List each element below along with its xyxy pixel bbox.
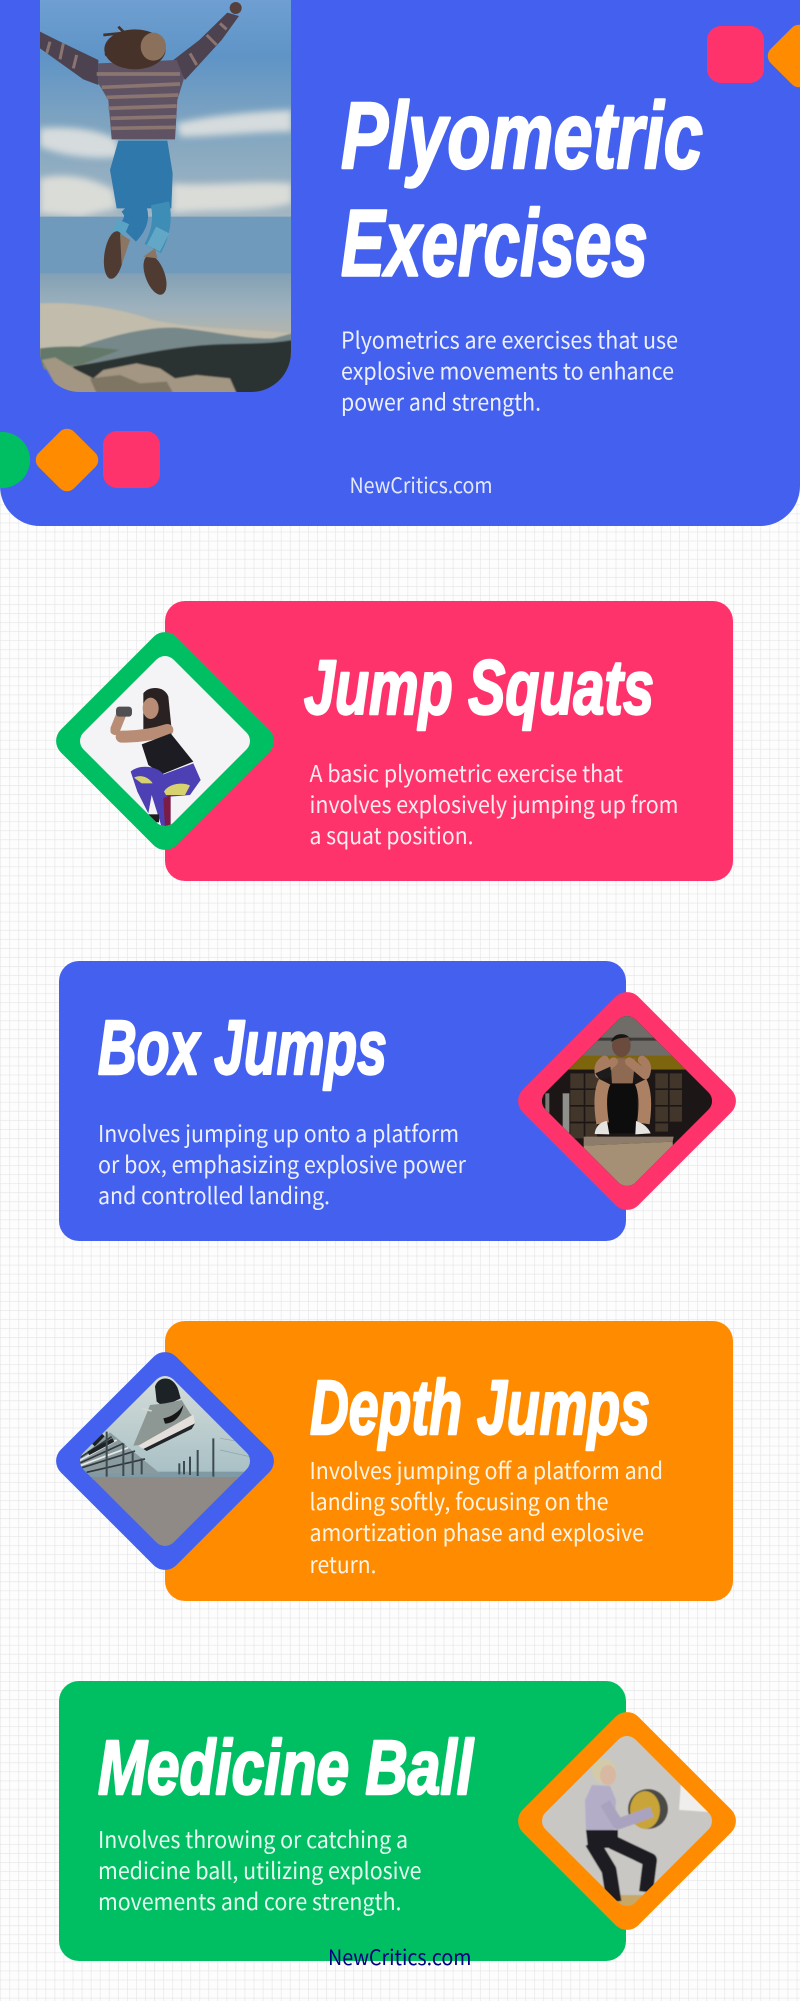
- description: [98, 1115, 466, 1211]
- description: Involves throwing or catching a: [98, 1821, 408, 1855]
- decorative shapes: top right: [707, 21, 800, 91]
- description: return.: [310, 1546, 376, 1580]
- description: amortization phase and explosive: [310, 1514, 644, 1548]
- panel: Medicine Ball: [59, 1681, 743, 1961]
- description: a squat position.: [310, 817, 474, 851]
- intro text: power and strength.: [341, 384, 541, 418]
- panel: Depth Jumps: [49, 1321, 733, 1601]
- heading: Medicine Ball: [98, 1725, 474, 1811]
- intro text: Plyometrics are exercises that use: [341, 322, 678, 356]
- heading: Depth Jumps: [310, 1365, 650, 1451]
- heading: Jump Squats: [304, 645, 654, 731]
- decorative shapes: bottom left: [0, 425, 160, 495]
- description: or box, emphasizing explosive power: [98, 1146, 466, 1180]
- title: Exercises: [341, 190, 648, 296]
- diamond frame with medicine ball photo: [518, 1712, 736, 1930]
- description: Involves jumping up onto a platform: [98, 1115, 459, 1149]
- description: movements and core strength.: [98, 1883, 402, 1917]
- description: [310, 1452, 663, 1580]
- description: [98, 1821, 422, 1917]
- intro text: [341, 322, 678, 418]
- hero photo: woman jumping above mountains: [40, 0, 292, 400]
- description: landing softly, focusing on the: [310, 1483, 608, 1517]
- diamond frame with squat photo: [56, 632, 274, 850]
- title: [341, 83, 703, 296]
- description: A basic plyometric exercise that: [310, 755, 623, 789]
- description: medicine ball, utilizing explosive: [98, 1852, 422, 1886]
- diamond frame with shoe photo: [56, 1352, 274, 1570]
- woman: [40, 2, 242, 298]
- diamond frame with box jump photo: [518, 992, 736, 1210]
- panel: hero header: [0, 0, 800, 526]
- description: involves explosively jumping up from: [310, 786, 678, 820]
- panel: Box Jumps: [59, 961, 743, 1241]
- footer source label: NewCritics.com: [328, 1942, 472, 1972]
- heading: Box Jumps: [98, 1005, 387, 1091]
- description: and controlled landing.: [98, 1177, 330, 1211]
- panel: Jump Squats: [49, 601, 733, 881]
- description: Involves jumping off a platform and: [310, 1452, 663, 1486]
- description: [310, 755, 678, 851]
- source label: NewCritics.com: [350, 470, 492, 500]
- intro text: explosive movements to enhance: [341, 352, 674, 386]
